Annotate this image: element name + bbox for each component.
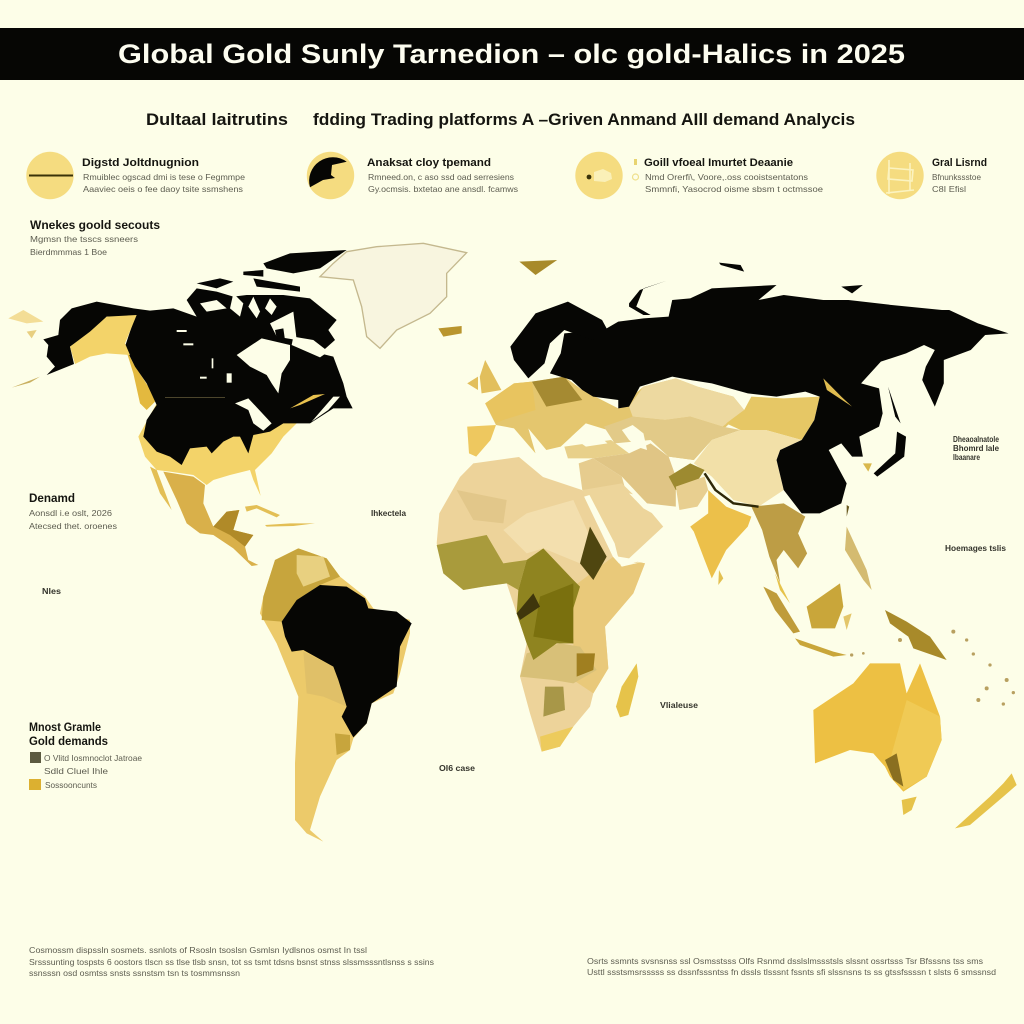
footer text left: Srsssunting tospsts 6 oostors tlscn ss tlse tlsb snsn, tot ss tsmt tdsns bsnst stnss slssmsssntlsnss s ssins (29, 957, 434, 967)
map label: nles: Nles (42, 586, 61, 596)
panel: gold liaend: Gral Lisrnd (932, 157, 987, 169)
legend: Sossooncunts (45, 780, 97, 790)
map label: hoemages tslis: Hoemages tslis (945, 543, 1006, 553)
panel: gold liaend: C8I Efisl (932, 184, 966, 194)
legend: Sdld Cluel Ihle (44, 766, 108, 776)
icon: cream box sketch (876, 152, 924, 199)
panel: gold liaend (876, 152, 987, 199)
subtitle: Dultaal laitrutins (146, 111, 288, 129)
footer text left: ssnsssn osd osmtss snsts ssnstsm tsn ts tosmmsnssn (29, 968, 240, 978)
legend: Gold demands (29, 736, 108, 748)
map label: ofi case: Ol6 case (439, 763, 475, 773)
panel: gold market demand: Smmnfi, Yasocrod oisme sbsm t octmssoe (645, 184, 823, 194)
panel: market day demand: Rmneed.on, c aso ssd oad serresiens (368, 172, 514, 182)
footer text left (29, 945, 434, 978)
panel: digital integration (26, 152, 245, 199)
world map (8, 243, 1017, 842)
panel: digital integration: Rmuiblec ogscad dmi is tese o Fegmmpe (83, 172, 245, 182)
panel: gold market demand: Nmd Orerfi\, Voore,.oss cooistsentatons (645, 172, 808, 182)
subtitle: fdding Trading platforms A –Griven Anmand AIll demand Analycis (313, 111, 855, 129)
legend: O Vlitd Iosmnoclot Jatroae (44, 753, 142, 763)
text block: demand: Aonsdl i.e oslt, 2026 (29, 508, 112, 518)
map label: east asia: Dheaoalnatole (953, 434, 999, 444)
icon: half black circle (307, 152, 354, 199)
footer text left: Cosmossm dispssln sosmets. ssnlots of Rsosln tsoslsn Gsmlsn Iydlsnos osmst In tssl (29, 945, 367, 955)
map: south america and africa (260, 457, 645, 842)
map label: east asia: Ibaanare (953, 452, 980, 462)
text block: demand: Denamd (29, 493, 75, 505)
text block: demand: Atecsed thet. oroenes (29, 521, 117, 531)
map label: ihkectela: Ihkectela (371, 508, 406, 518)
text block: demand (29, 493, 117, 531)
panel: market day demand (307, 152, 518, 199)
title banner (0, 28, 1024, 80)
panel: market day demand: Gy.ocmsis. bxtetao ane ansdl. fcamws (368, 184, 518, 194)
footer text right: Usttl ssstsmsrsssss ss dssnfsssntss fn dssls tlsssnt fssnts sfi slssnsns ts ss gtssfssssn t slsts 6 smssnsd (587, 967, 996, 977)
title banner: Global Gold Sunly Tarnedion – olc gold-Halics in 2025 (118, 39, 905, 69)
map: north america (8, 243, 467, 566)
map: oceania and southeast asia islands (763, 527, 1017, 828)
text block: gold secouts: Mgmsn the tsscs ssneers (30, 234, 138, 244)
map label: vlialeuse: Vlialeuse (660, 700, 698, 710)
icon: gold bars (575, 152, 623, 199)
panel: digital integration: Aaaviec oeis o fee daoy tsite ssmshens (83, 184, 243, 194)
legend swatch: gold (29, 779, 41, 790)
footer text right (587, 956, 996, 977)
panel: digital integration: Digstd Joltdnugnion (82, 157, 199, 169)
text block: gold secouts (30, 218, 160, 257)
legend (29, 722, 142, 790)
legend: Mnost Gramle (29, 722, 101, 734)
icon: gold circle with line (26, 152, 74, 199)
icon: small bullet marks (632, 159, 638, 180)
panel: gold market demand (575, 152, 823, 199)
text block: gold secouts: Wnekes goold secouts (30, 218, 160, 232)
footer text right: Osrts ssmnts svsnsnss ssl Osmsstsss Olfs Rsnmd dsslslmssstsls slssnt ossrtsss Tsr Bfsssns tss sms (587, 956, 983, 966)
panel: gold market demand: Goill vfoeal Imurtet Deaanie (644, 157, 793, 169)
map label: east asia (953, 434, 999, 462)
map: eurasia (467, 260, 1009, 585)
panel: gold liaend: Bfnunkssstoe (932, 172, 981, 182)
legend swatch: dark (30, 752, 41, 763)
text block: gold secouts: Bierdmmmas 1 Boe (30, 247, 107, 257)
map label: east asia: Bhomrd lale (953, 443, 999, 453)
panel: market day demand: Anaksat cloy tpemand (367, 157, 491, 169)
